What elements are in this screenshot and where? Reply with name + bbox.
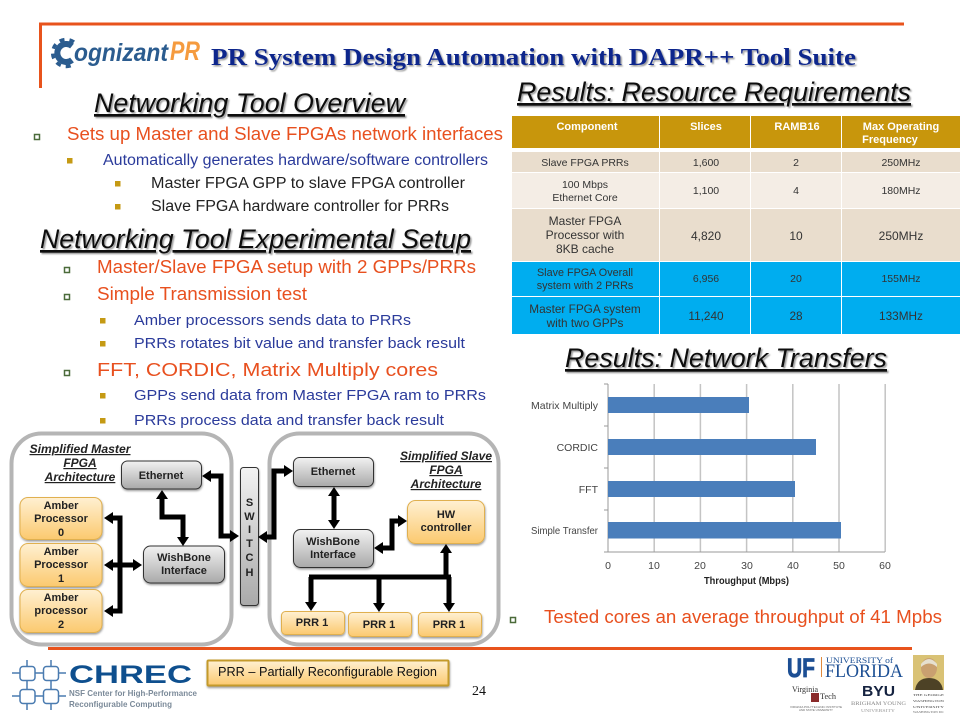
logo: CognizantPR: ognizant <box>74 39 170 67</box>
x axis tick labels <box>605 560 891 572</box>
box: amber processor 2: Amber <box>44 592 79 604</box>
box: PRR 1 middle <box>348 612 412 636</box>
table row: master FPGA system: with two GPPs <box>546 316 623 330</box>
box: wishbone interface: WishBone <box>157 552 211 564</box>
box: slave ethernet: Ethernet <box>311 466 356 478</box>
table row: slave FPGA PRRs: Slave FPGA PRRs <box>541 157 629 169</box>
x axis tick labels: 20 <box>694 560 706 572</box>
box: switch: S <box>246 497 253 509</box>
bar chart: throughput <box>531 384 891 587</box>
text block: experimental setup bullets: GPPs send data from Master FPGA ram to PRRs <box>134 387 486 404</box>
box: slave wishbone interface <box>294 530 374 568</box>
caption: slave architecture: Simplified Slave <box>400 449 492 463</box>
box: wishbone interface <box>144 546 224 583</box>
box: switch: I <box>248 524 251 536</box>
box: slave wishbone interface: WishBone <box>306 536 360 548</box>
box: slave ethernet <box>294 458 374 486</box>
table row: slave FPGA PRRs: 250MHz <box>881 157 921 169</box>
table row: master FPGA processor: 10 <box>789 229 803 243</box>
table row: slave FPGA PRRs: 2 <box>793 157 799 169</box>
caption: slave architecture: FPGA <box>429 463 463 477</box>
logo: George Washington University: WASHINGTON <box>913 699 945 703</box>
box: switch: T <box>246 538 253 550</box>
logo: University of Florida <box>787 653 903 683</box>
x axis tick labels: 60 <box>879 560 891 572</box>
logo: Virginia Tech: VIRGINIA POLYTECHNIC INSTITUTE <box>790 705 842 709</box>
bar: simple transfer <box>608 522 841 538</box>
box: switch <box>240 468 258 606</box>
table row: slave FPGA overall: system with 2 PRRs <box>537 280 634 292</box>
table row: master FPGA system: 11,240 <box>688 309 724 323</box>
table row: slave FPGA PRRs <box>512 152 960 172</box>
table row: ethernet core: Ethernet Core <box>552 192 618 204</box>
table row: slave FPGA overall: 155MHz <box>881 273 921 285</box>
bar: FFT <box>608 481 795 497</box>
text block: experimental setup bullets: PRRs rotates bit value and transfer back result <box>134 335 466 352</box>
table row: master FPGA system <box>512 297 960 334</box>
table row: ethernet core: 180MHz <box>881 185 921 197</box>
logo: CognizantPR <box>53 36 200 67</box>
box: amber processor 2: 2 <box>58 619 64 631</box>
text block: experimental setup bullets: PRRs process data and transfer back result <box>134 412 445 429</box>
table row: master FPGA system: 28 <box>789 309 803 323</box>
box: wishbone interface: Interface <box>161 565 207 577</box>
legend: PRR definition <box>208 660 448 686</box>
arrows: PRR bus to PRRs and HW controller <box>309 553 451 603</box>
box: amber processor 0: 0 <box>58 527 64 539</box>
table row: master FPGA system: 133MHz <box>879 309 923 323</box>
table header row <box>512 116 960 148</box>
arrow: switch to slave ethernet <box>267 471 284 537</box>
heading: results resource requirements: Results: Resource Requirements <box>517 77 911 107</box>
panel: simplified slave FPGA architecture <box>270 434 498 644</box>
category labels: FFT <box>579 484 599 496</box>
text block: overview bullets <box>34 123 503 215</box>
box: amber processor 1 <box>20 544 102 586</box>
logo: Virginia Tech: Virginia <box>792 685 818 694</box>
box: HW controller <box>408 500 484 544</box>
box: ethernet: Ethernet <box>139 470 184 482</box>
caption: master architecture: Architecture <box>44 470 116 484</box>
caption: master architecture <box>30 442 132 484</box>
box: PRR 1 middle: PRR 1 <box>363 619 395 631</box>
logo: CognizantPR: PR <box>170 36 200 66</box>
bar: matrix multiply <box>608 397 749 413</box>
text block: experimental setup bullets: Amber processors sends data to PRRs <box>134 312 411 329</box>
table row: ethernet core: 100 Mbps <box>562 179 608 191</box>
category labels: Matrix Multiply <box>531 400 599 412</box>
logo: Virginia Tech: Tech <box>820 692 836 701</box>
logo: University of Florida: UNIVERSITY of <box>826 655 893 665</box>
box: amber processor 1: Amber <box>44 546 79 558</box>
table row: slave FPGA overall <box>512 262 960 296</box>
arrow: amber processors bus to wishbone <box>113 518 133 611</box>
box: PRR 1 left <box>282 612 344 634</box>
box: amber processor 1: 1 <box>58 573 64 585</box>
table row: ethernet core <box>512 173 960 208</box>
heading: results network transfers: Results: Network Transfers <box>565 343 887 373</box>
heading: networking tool experimental setup: Networking Tool Experimental Setup <box>40 224 471 254</box>
logo: George Washington University: THE GEORGE <box>913 693 944 697</box>
table header row: RAMB16 <box>774 121 820 133</box>
box: PRR 1 right <box>418 612 482 636</box>
bar: CORDIC <box>608 439 816 455</box>
logo: CHREC: CHREC <box>69 661 192 689</box>
top and left frame line <box>40 24 904 88</box>
text block: experimental setup bullets: Master/Slave FPGA setup with 2 GPPs/PRRs <box>97 257 476 277</box>
box: PRR 1 right: PRR 1 <box>433 619 465 631</box>
box: amber processor 2: processor <box>34 605 88 617</box>
box: HW controller: controller <box>421 522 472 534</box>
box: slave wishbone interface: Interface <box>310 549 356 561</box>
box: PRR 1 left: PRR 1 <box>296 617 328 629</box>
box: amber processor 2 <box>20 590 102 632</box>
logo: University of Florida: UF <box>787 653 815 683</box>
text block: experimental setup bullets: Simple Transmission test <box>97 284 307 304</box>
table row: slave FPGA PRRs: 1,600 <box>693 157 719 169</box>
table row: master FPGA processor: Master FPGA <box>549 214 621 228</box>
table header row: Max Operating <box>863 121 939 133</box>
caption: master architecture: Simplified Master <box>30 442 132 456</box>
table row: ethernet core: 4 <box>793 185 799 197</box>
caption: slave architecture: Architecture <box>410 477 482 491</box>
table row: slave FPGA overall: Slave FPGA Overall <box>537 267 633 279</box>
logo: CHREC: NSF Center for High-Performance <box>69 688 197 698</box>
category labels: CORDIC <box>557 442 598 454</box>
text block: overview bullets: Master FPGA GPP to slave FPGA controller <box>151 175 465 192</box>
table row: slave FPGA overall: 20 <box>790 273 802 285</box>
title: PR System Design Automation with DAPR++ Tool Suite <box>211 45 856 71</box>
arrow: master ethernet to switch <box>211 476 230 536</box>
table: resource requirements <box>512 116 960 334</box>
category labels: Simple Transfer <box>531 525 598 537</box>
box: ethernet <box>122 461 202 489</box>
logo: George Washington University <box>913 655 945 714</box>
table row: master FPGA processor: Processor with <box>546 228 624 242</box>
table row: master FPGA processor: 250MHz <box>879 229 923 243</box>
x axis tick labels: 50 <box>833 560 845 572</box>
box: HW controller: HW <box>437 509 456 521</box>
logo: Virginia Tech: AND STATE UNIVERSITY <box>799 708 833 712</box>
text block: overview bullets: Slave FPGA hardware controller for PRRs <box>151 198 449 215</box>
panel: simplified master FPGA architecture <box>12 434 232 644</box>
box: amber processor 0 <box>20 498 102 540</box>
page number: 24 <box>472 684 486 699</box>
box: switch: W <box>244 511 255 523</box>
logo: University of Florida: FLORIDA <box>825 661 903 682</box>
table header row: Frequency <box>862 134 919 146</box>
table row: master FPGA processor: 8KB cache <box>556 242 614 256</box>
logo: CHREC <box>12 660 197 710</box>
logo: George Washington University: UNIVERSITY <box>913 705 945 709</box>
legend: PRR definition: PRR – Partially Reconfigurable Region <box>218 665 437 679</box>
caption: master architecture: FPGA <box>63 456 97 470</box>
x axis tick labels: 0 <box>605 560 611 572</box>
arrow: wishbone to HW controller <box>383 521 398 548</box>
table row: slave FPGA overall: 6,956 <box>693 273 719 285</box>
bottom rule <box>48 647 912 650</box>
box: amber processor 0: Amber <box>44 500 79 512</box>
x axis tick labels: 10 <box>648 560 660 572</box>
table row: master FPGA system: Master FPGA system <box>529 302 641 316</box>
text block: overview bullets: Sets up Master and Slave FPGAs network interfaces <box>67 123 503 144</box>
logo: George Washington University: WASHINGTON DC <box>913 710 944 714</box>
table header row: Component <box>556 121 618 133</box>
x axis title: Throughput (Mbps) <box>704 576 789 587</box>
table row: ethernet core: 1,100 <box>693 185 719 197</box>
box: switch: H <box>246 567 254 579</box>
logo: BYU <box>851 683 906 713</box>
box: amber processor 1: Processor <box>34 559 89 571</box>
x axis tick labels: 40 <box>787 560 799 572</box>
table header row: Slices <box>690 121 722 133</box>
box: amber processor 0: Processor <box>34 513 89 525</box>
table row: master FPGA processor: 4,820 <box>691 229 721 243</box>
box: switch: C <box>246 552 254 564</box>
logo: Virginia Tech <box>790 685 842 712</box>
logo: BYU: UNIVERSITY <box>861 708 895 713</box>
text block: experimental setup bullets <box>64 257 486 429</box>
logo: BYU: BYU <box>862 683 895 700</box>
text block: overview bullets: Automatically generates hardware/software controllers <box>103 152 488 169</box>
table row: master FPGA processor <box>512 209 960 261</box>
arrow: slave ethernet to wishbone <box>332 496 336 520</box>
text block: experimental setup bullets: FFT, CORDIC, Matrix Multiply cores <box>97 359 438 380</box>
logo: BYU: BRIGHAM YOUNG <box>851 702 906 707</box>
logo: CHREC: Reconfigurable Computing <box>69 699 172 709</box>
category labels <box>531 400 599 537</box>
text block: tested cores: Tested cores an average throughput of 41 Mpbs <box>544 607 942 627</box>
arrow: ethernet to wishbone <box>162 499 183 537</box>
heading: networking tool overview: Networking Tool Overview <box>94 88 407 118</box>
x axis tick labels: 30 <box>741 560 753 572</box>
caption: slave architecture <box>400 449 492 491</box>
